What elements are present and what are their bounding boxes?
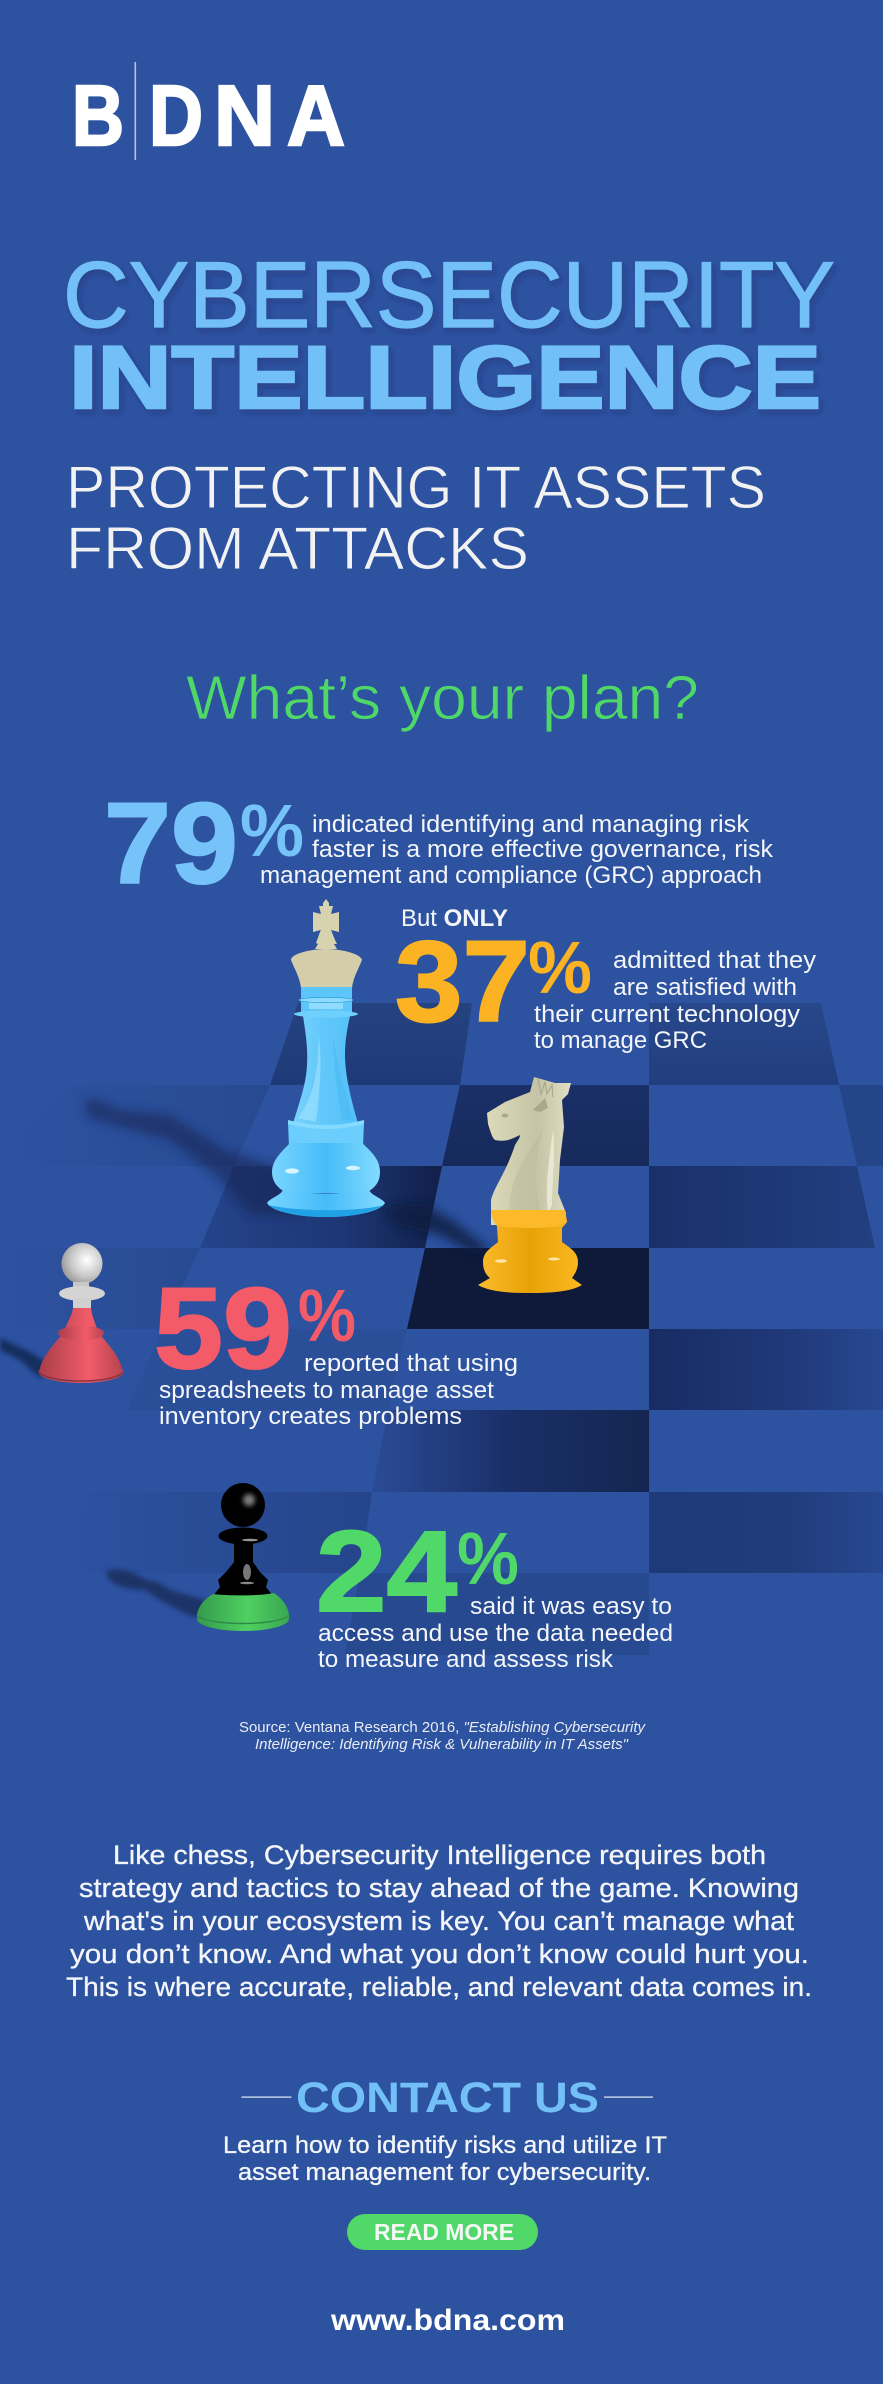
contact text <box>223 2132 667 2186</box>
stat description: reported that using <box>304 1350 518 1377</box>
body paragraph: what's in your ecosystem is key. You can’t manage what <box>83 1906 795 1936</box>
number 37: 37 <box>395 918 530 1046</box>
body paragraph: This is where accurate, reliable, and relevant data comes in. <box>66 1972 812 2002</box>
source note: Intelligence: Identifying Risk & Vulnerability in IT Assets" <box>255 1737 629 1753</box>
section heading: What’s your plan? <box>186 664 699 733</box>
stat: 79% <box>104 780 774 908</box>
logo divider <box>134 62 136 160</box>
title line 2: INTELLIGENCE <box>69 327 821 427</box>
stat: 24% <box>316 1508 673 1673</box>
website link: www.bdna.com <box>330 2304 565 2337</box>
stat description: access and use the data needed <box>318 1620 673 1647</box>
logo <box>72 62 345 164</box>
read more button: READ MORE <box>374 2219 514 2245</box>
pawn head <box>59 1243 105 1308</box>
knight piece <box>478 1077 582 1293</box>
stat description: spreadsheets to manage asset <box>159 1377 494 1404</box>
king body <box>267 987 385 1217</box>
chessboard floor <box>0 1003 883 1655</box>
subtitle <box>66 454 766 582</box>
stat description: to manage GRC <box>534 1027 707 1054</box>
stat description <box>260 811 774 889</box>
pawn base <box>38 1308 124 1383</box>
logo letters DNA <box>149 69 345 164</box>
percent sign: % <box>528 926 592 1009</box>
number 79: 79 <box>104 780 238 908</box>
percent sign: % <box>240 789 304 872</box>
subtitle: PROTECTING IT ASSETS <box>66 454 766 521</box>
logo letters DNA: D <box>149 69 203 164</box>
pawn base <box>197 1593 289 1631</box>
stat description: said it was easy to <box>470 1593 672 1620</box>
knight head and neck <box>487 1077 571 1225</box>
lead-in: But ONLY <box>401 905 508 932</box>
body paragraph: you don’t know. And what you don’t know could hurt you. <box>70 1939 809 1969</box>
contact heading: CONTACT US <box>296 2074 599 2122</box>
red pawn <box>38 1243 124 1383</box>
contact text: asset management for cybersecurity. <box>238 2159 651 2186</box>
knight base <box>478 1210 582 1293</box>
title <box>63 242 835 427</box>
body paragraph: Like chess, Cybersecurity Intelligence requires both <box>113 1840 766 1870</box>
stat: 37% <box>395 905 816 1054</box>
source note: Source: Ventana Research 2016, "Establishing Cybersecurity <box>239 1720 646 1736</box>
logo letters DNA: A <box>287 69 345 164</box>
read more button <box>347 2214 538 2250</box>
stat description <box>159 1350 518 1430</box>
stat description: admitted that they <box>613 947 816 974</box>
number 24: 24 <box>316 1508 457 1636</box>
king head <box>291 899 362 988</box>
subtitle: FROM ATTACKS <box>66 515 529 582</box>
stat description: management and compliance (GRC) approach <box>260 862 762 889</box>
stat description <box>318 1593 673 1673</box>
percent sign: % <box>298 1274 356 1357</box>
stat: 59% <box>154 1265 518 1430</box>
logo letters DNA: N <box>214 69 275 164</box>
black pawn <box>197 1483 289 1631</box>
body paragraph <box>66 1840 812 2002</box>
title line 1: CYBERSECURITY <box>63 242 835 347</box>
body paragraph: strategy and tactics to stay ahead of the game. Knowing <box>79 1873 799 1903</box>
stat description: inventory creates problems <box>159 1403 462 1430</box>
number 59: 59 <box>154 1265 292 1393</box>
percent sign: % <box>457 1517 519 1600</box>
stat description: their current technology <box>534 1001 800 1028</box>
logo letter B: B <box>72 69 124 164</box>
contact text: Learn how to identify risks and utilize IT <box>223 2132 667 2159</box>
piece shadows on the board <box>0 1100 490 1618</box>
stat description: indicated identifying and managing risk <box>312 811 750 838</box>
stat description: to measure and assess risk <box>318 1646 614 1673</box>
king piece <box>267 899 385 1217</box>
stat description: are satisfied with <box>613 974 797 1001</box>
pawn head <box>213 1483 273 1596</box>
source note <box>239 1720 646 1753</box>
stat description: faster is a more effective governance, risk <box>312 836 774 863</box>
stat description <box>534 947 816 1054</box>
